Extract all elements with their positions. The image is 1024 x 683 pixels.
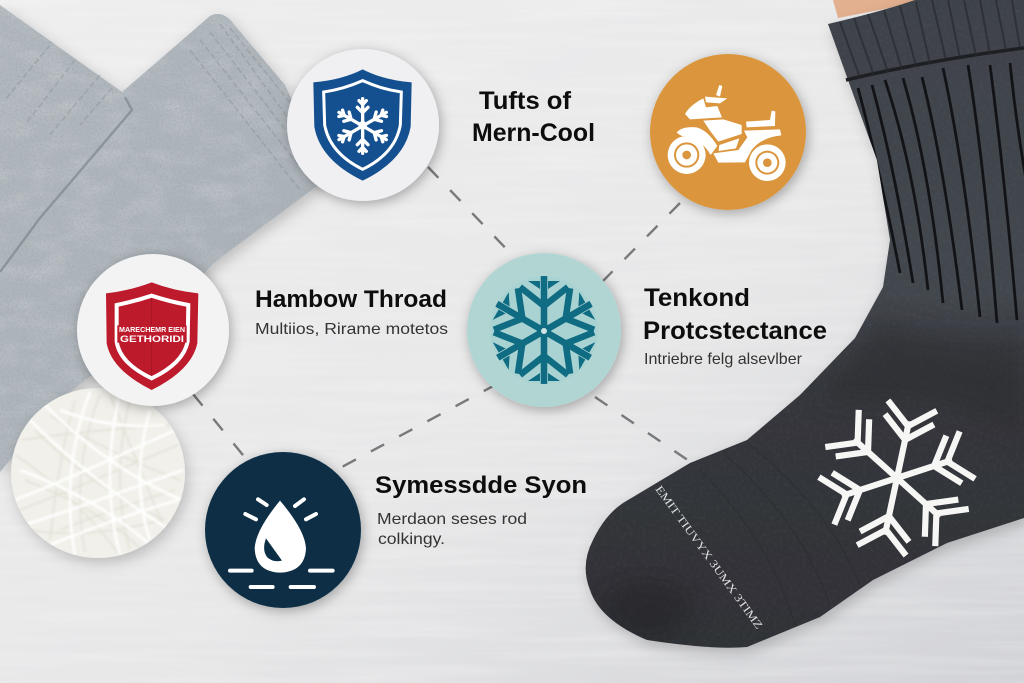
heading: Tufts of Mern-Cool <box>472 87 595 147</box>
icon: large white snowflake on sock <box>807 390 987 566</box>
text block: Tenkond Protcstectance: Tenkond <box>644 284 750 312</box>
text block: Tenkond Protcstectance: Protcstectance <box>643 317 827 345</box>
text block: Hambow Throad <box>255 286 448 338</box>
shield lettering <box>119 325 185 345</box>
badge: blue shield snowflake <box>287 49 439 201</box>
icon: water drop <box>230 499 333 587</box>
grey knit socks <box>0 5 328 472</box>
dashed connector lines <box>193 167 695 468</box>
yarn ball <box>11 388 185 558</box>
badge: navy water drop <box>205 452 361 608</box>
badge: orange ATV <box>650 54 806 210</box>
icon: red shield <box>106 282 198 390</box>
heading: Tufts of Mern-Cool: Tufts of <box>479 87 572 115</box>
icon: teal snowflake <box>492 276 596 384</box>
badge: teal snowflake disc <box>467 253 621 407</box>
icon: ATV <box>668 85 786 181</box>
text block: Symessdde Syon: colkingy. <box>378 531 445 548</box>
badge: red shield <box>77 254 229 406</box>
text block: Hambow Throad: Hambow Throad <box>255 286 447 313</box>
shield lettering: MARECHEMR EIEN <box>119 325 185 334</box>
shield lettering: GETHORIDI <box>120 334 184 345</box>
dark grey sock with skin <box>586 0 1024 648</box>
text block: Tenkond Protcstectance: Intriebre felg alsevlber <box>644 351 803 368</box>
text block: Symessdde Syon: Merdaon seses rod <box>377 511 527 528</box>
text block: Hambow Throad: Multiios, Rirame motetos <box>255 321 448 338</box>
text block: Symessdde Syon <box>375 472 587 548</box>
icon: blue shield <box>313 69 412 181</box>
leg rib lines <box>858 63 1024 323</box>
text block: Symessdde Syon: Symessdde Syon <box>375 472 587 499</box>
sock toe lettering: EMIT TIUVYX 3UMX 3TIMZ <box>653 484 765 632</box>
heading: Tufts of Mern-Cool: Mern-Cool <box>472 119 595 147</box>
text block: Tenkond Protcstectance <box>643 284 827 368</box>
